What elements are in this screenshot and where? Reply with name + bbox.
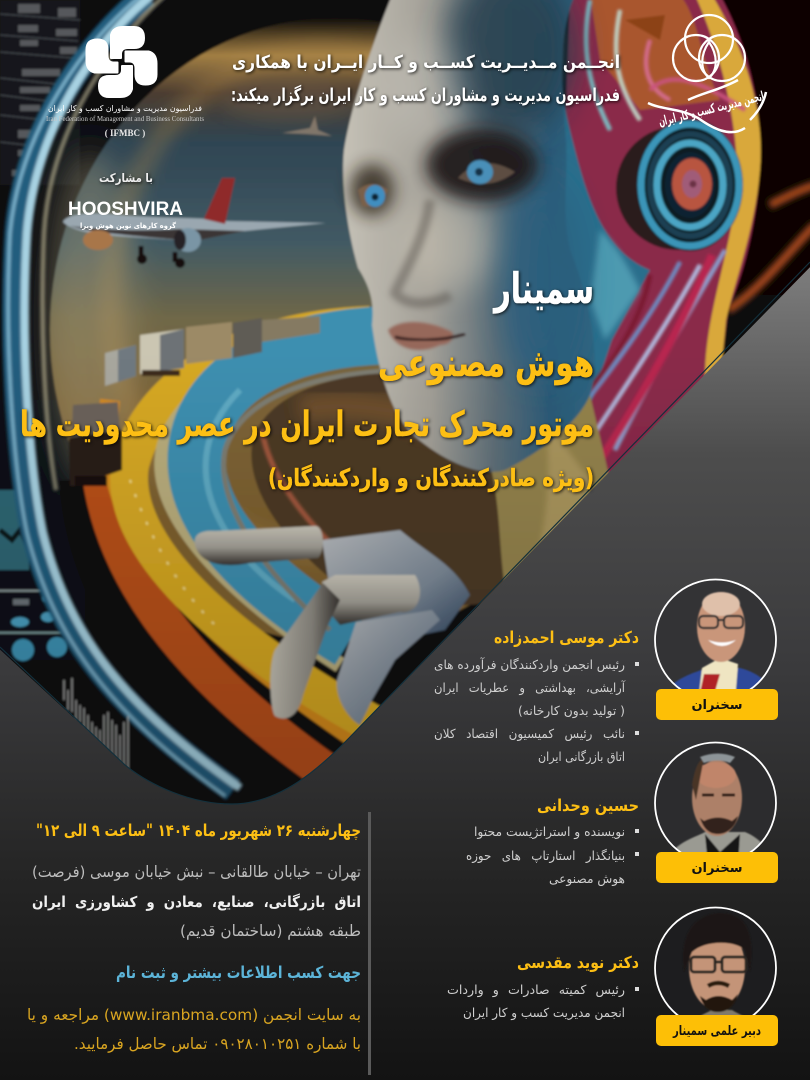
- plane small: [282, 116, 332, 136]
- sky: [48, 18, 472, 638]
- address: تهران – خیابان طالقانی – نبش خیابان موسی (فرصت): [32, 863, 361, 882]
- seminar title block: [20, 264, 594, 492]
- logo: Hooshvira: گروه کارهای نوین هوش ویرا: [80, 221, 177, 230]
- stock board: [0, 0, 80, 185]
- logo: business management association: [648, 15, 766, 132]
- portrait: Dr. Ahmadzadeh: [654, 579, 776, 702]
- registration heading: جهت کسب اطلاعات بیشتر و ثبت نام: [116, 963, 361, 983]
- icon: three rings: [673, 15, 745, 81]
- venue: اتاق بازرگانی، صنایع، معادن و کشاورزی ایران: [32, 893, 361, 911]
- registration line 2: با شماره ۰۹۰۲۸۰۱۰۲۵۱ تماس حاصل فرمایید.: [74, 1035, 361, 1053]
- logo: Hooshvira: HOOSHVIRA: [68, 199, 183, 220]
- role badge: سخنران: [691, 698, 743, 713]
- IFMBC abbreviation: ( IFMBC ): [105, 128, 145, 138]
- logo: Hooshvira: [68, 199, 183, 230]
- nose and mouth: [395, 200, 450, 303]
- trucks: [69, 316, 320, 486]
- role badge: سخنران: [691, 861, 743, 876]
- face: [343, 0, 595, 472]
- role badge: دبیر علمی سمینار: [672, 1024, 761, 1039]
- neck: [490, 395, 610, 581]
- icon: IFMBC mark: [86, 27, 156, 97]
- rainbow road: [72, 325, 420, 795]
- IFMBC English name: Iran Federation of Management and Business Consultants: [46, 115, 204, 123]
- organizers line 2: فدراسیون مدیریت و مشاوران کسب و کار ایران برگزار میکند:: [231, 84, 620, 106]
- hand: [195, 526, 470, 725]
- ear swirl: [616, 119, 743, 251]
- right dark backdrop: [724, 0, 810, 296]
- speaker bio: اتاق بازرگانی ایران: [538, 749, 625, 765]
- logo: IFMBC: [46, 27, 204, 138]
- speaker 1: [434, 579, 778, 765]
- speaker bio: انجمن مدیریت کسب و کار ایران: [463, 1005, 625, 1021]
- speaker bio: آرایشی، بهداشتی و عطریات ایران: [434, 680, 625, 696]
- speaker bio: نائب رئیس کمیسیون اقتصاد کلان: [434, 726, 625, 742]
- floor: طبقه هشتم (ساختمان قدیم): [180, 922, 361, 940]
- brown ground inside road: [250, 372, 504, 608]
- speaker bio: [434, 657, 639, 765]
- date and time: چهارشنبه ۲۶ شهریور ماه ۱۴۰۴ "ساعت ۹ الی ۱۲": [36, 821, 361, 841]
- role badge: [656, 852, 778, 883]
- speaker bio: [466, 824, 639, 887]
- role badge: [656, 689, 778, 720]
- portrait: Vahdani: [654, 742, 777, 852]
- dim overlay: [0, 380, 621, 802]
- registration line 1: به سایت انجمن (www.iranbma.com) مراجعه و یا: [27, 1006, 361, 1025]
- event details: [27, 812, 371, 1075]
- bar chart in lower left: [64, 678, 128, 770]
- speaker 2: [466, 742, 778, 887]
- title: subtitle: موتور محرک تجارت ایران در عصر محدودیت ها: [20, 405, 594, 445]
- portrait: Dr. Moghaddasi: [654, 906, 777, 1015]
- partner label: با مشارکت: [99, 171, 153, 185]
- title: seminar: سمینار: [493, 264, 594, 313]
- hero illustration: robot face, trade road, plane and hand: [0, 0, 810, 820]
- hair: [564, 0, 762, 474]
- role badge: [656, 1015, 778, 1046]
- speaker bio: بنیانگذار استارتاپ های حوزه: [466, 848, 625, 864]
- IFMBC Persian name: فدراسیون مدیریت و مشاوران کسب و کار ایران: [48, 104, 202, 113]
- speaker bio: رئیس انجمن واردکنندگان فرآورده های: [434, 657, 625, 673]
- speaker name: دکتر موسی احمدزاده: [494, 628, 639, 648]
- organizers heading: [231, 52, 620, 106]
- speaker bio: نویسنده و استراتژیست محتوا: [474, 824, 625, 840]
- speaker bio: رئیس کمیته صادرات و واردات: [447, 982, 625, 998]
- title: audience note: (ویژه صادرکنندگان و واردکنندگان): [268, 464, 594, 492]
- plane large: [63, 178, 326, 268]
- speaker name: دکتر نوید مقدسی: [517, 953, 639, 973]
- eye sockets and eyes: [426, 129, 538, 201]
- light beams on the rim: [8, 0, 240, 796]
- speaker bio: هوش مصنوعی: [549, 871, 625, 887]
- title: artificial intelligence: هوش مصنوعی: [378, 341, 594, 385]
- calligraphy swash: [648, 80, 766, 132]
- speaker bio: ( تولید بدون کارخانه): [518, 703, 625, 719]
- speaker name: حسین وحدانی: [537, 796, 639, 816]
- speaker 3: [447, 907, 778, 1046]
- hero edge line: [0, 262, 810, 804]
- speaker bio: [447, 982, 639, 1021]
- lower left dashboard: [0, 400, 85, 661]
- organizers line 1: انجــمن مــدیــریت کســب و کــار ایــران با همکاری: [232, 52, 620, 73]
